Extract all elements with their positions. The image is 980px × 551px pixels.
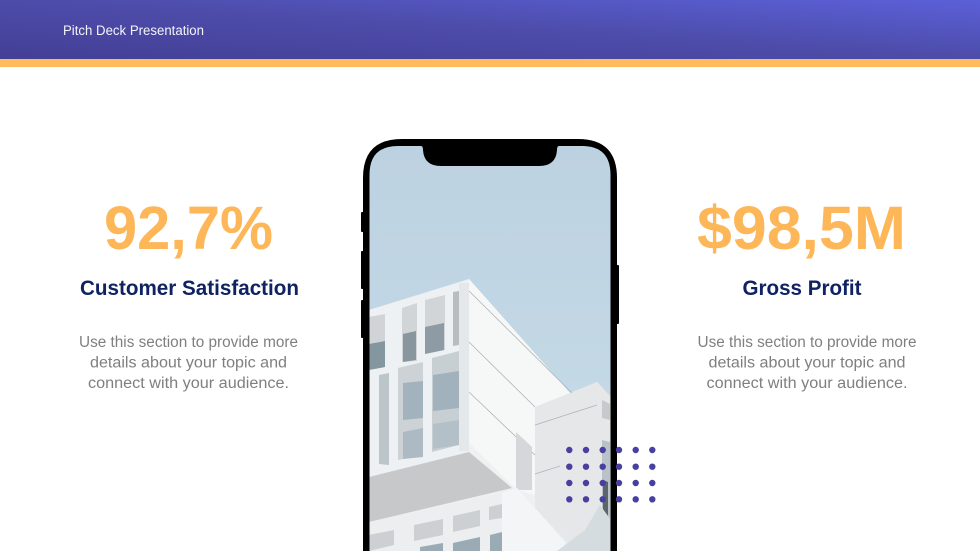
lower block [370, 522, 371, 523]
underside shadow [369, 452, 512, 522]
small balcony [516, 432, 532, 490]
panel: customer satisfaction [79, 194, 299, 392]
text block: customer satisfaction details [79, 334, 298, 392]
lower windows [369, 504, 502, 551]
phone body [363, 139, 617, 551]
panel: gross profit [697, 194, 916, 392]
facade lines [469, 291, 597, 474]
header band [0, 0, 980, 67]
text block: gross profit details: Use this section to provide more [698, 334, 916, 351]
text block: gross profit details [698, 334, 916, 392]
stat: $98,5M: $98,5M [697, 194, 906, 262]
upper window row [369, 291, 459, 370]
building base mass [370, 279, 610, 522]
header title: Pitch Deck Presentation [63, 23, 204, 38]
heading: customer satisfaction: Customer Satisfaction [80, 277, 299, 300]
stat: 92,7%: 92,7% [104, 194, 273, 262]
lower window row [379, 351, 459, 465]
text block: customer satisfaction details: connect with your audience. [88, 375, 289, 392]
phone side buttons [361, 212, 619, 338]
text block: gross profit details: connect with your audience. [706, 375, 908, 392]
front face [370, 308, 374, 310]
text block: gross profit details: details about your topic and [708, 354, 906, 372]
text block: customer satisfaction details: details about your topic and [90, 354, 287, 372]
right face [469, 279, 570, 393]
heading: gross profit: Gross Profit [742, 277, 862, 300]
phone mockup [361, 139, 619, 551]
pillars edge [459, 283, 469, 451]
text block: customer satisfaction details: Use this section to provide more [79, 334, 298, 351]
right block [535, 382, 611, 551]
phone screen photo: white building against a blue sky [369, 146, 611, 551]
decorative dot grid [566, 447, 656, 502]
